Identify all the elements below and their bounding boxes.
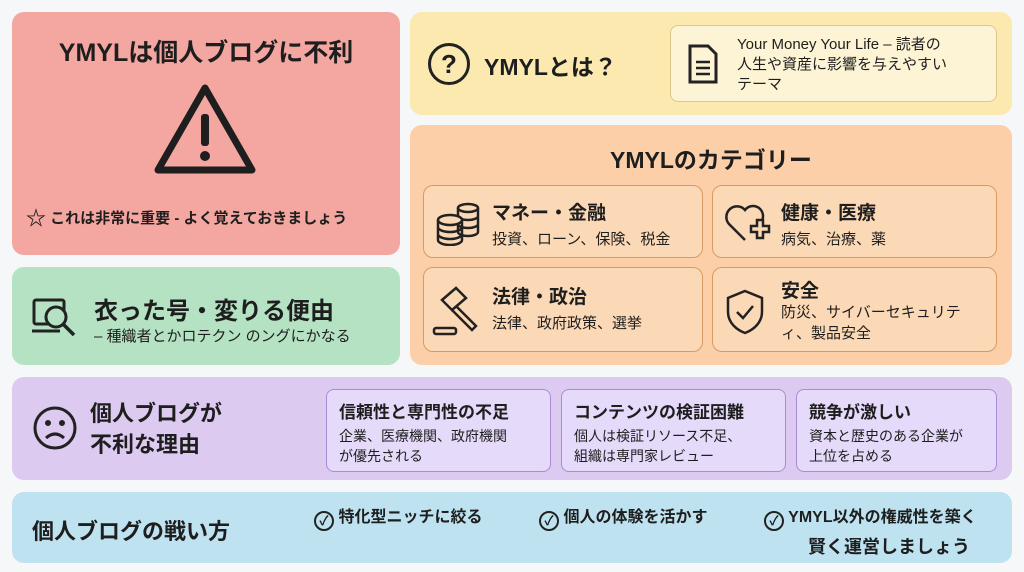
icon: search laptop: [32, 298, 76, 336]
title: YMYLは個人ブログに不利: [59, 39, 353, 67]
category: safety: 防災、サイバーセキュリティ、製品安全: [781, 304, 961, 342]
definition text: テーマ: [737, 76, 782, 93]
heading: 個人ブログが: [90, 401, 222, 426]
category: money: マネー・金融: [492, 203, 606, 224]
reason 3: [796, 389, 997, 472]
reason 3: 資本と歴史のある企業が上位を占める: [809, 428, 963, 464]
category: law: [423, 267, 703, 352]
heading: 衣った号・変りる便由: [94, 298, 334, 325]
tip 2: ✓: [544, 513, 554, 528]
icon: question: ?: [441, 49, 457, 79]
panel: YMYL disadvantage: [12, 12, 400, 255]
definition text: Your Money Your Life – 読者の: [737, 36, 941, 53]
reason 1: 信頼性と専門性の不足: [339, 403, 509, 422]
icon: question: [428, 43, 470, 85]
tip 2: 個人の体験を活かす: [563, 509, 707, 526]
panel: categories: [410, 125, 1012, 365]
icon: document: [688, 44, 718, 84]
category: safety: 安全: [781, 281, 819, 302]
heading: YMYLのカテゴリー: [610, 147, 812, 173]
category: law: 法律・政治: [492, 287, 587, 308]
tip 3: ✓: [769, 513, 779, 528]
reason 3: 競争が激しい: [809, 403, 911, 422]
definition text: 人生や資産に影響を与えやすい: [737, 56, 947, 73]
reason 1: [326, 389, 551, 472]
category: law: 法律、政府政策、選挙: [492, 315, 642, 332]
reason 2: 個人は検証リソース不足、組織は専門家レビュー: [574, 428, 741, 464]
category: money: 投資、ローン、保険、税金: [492, 231, 670, 248]
reason 2: [561, 389, 786, 472]
panel: reasons: [12, 377, 1012, 480]
icon: warning: [154, 84, 256, 174]
heading: 個人ブログの戦い方: [32, 519, 230, 544]
subtext: – 種織者とかロテクン のングにかなる: [94, 328, 351, 345]
closing note: 賢く運営しましょう: [808, 537, 970, 557]
tip 1: 特化型ニッチに絞る: [338, 509, 482, 526]
panel: strategy: [12, 492, 1012, 563]
reason 2: コンテンツの検証困難: [574, 403, 744, 422]
panel: what is YMYL: [410, 12, 1012, 115]
reason 1: 企業、医療機関、政府機関が優先される: [339, 428, 507, 464]
heading: YMYLとは？: [484, 54, 617, 80]
definition text: [737, 36, 947, 93]
category: health: [712, 185, 997, 258]
definition box: [670, 25, 997, 102]
heading: [90, 401, 222, 457]
tip 3: [764, 508, 977, 531]
category: health: 健康・医療: [781, 203, 876, 224]
heading: 不利な理由: [90, 432, 200, 457]
tip 1: ✓: [319, 513, 329, 528]
tip 2: [539, 508, 707, 531]
panel: green: [12, 267, 400, 365]
tip 1: [314, 508, 482, 531]
category: health: 病気、治療、薬: [781, 231, 886, 248]
note with star: ☆ これは非常に重要 - よく覚えておきましょう: [26, 208, 347, 230]
icon: sad face: [34, 406, 76, 450]
category: safety: [712, 267, 997, 352]
tip 3: YMYL以外の権威性を築く: [788, 509, 977, 526]
category: money: [423, 185, 703, 258]
